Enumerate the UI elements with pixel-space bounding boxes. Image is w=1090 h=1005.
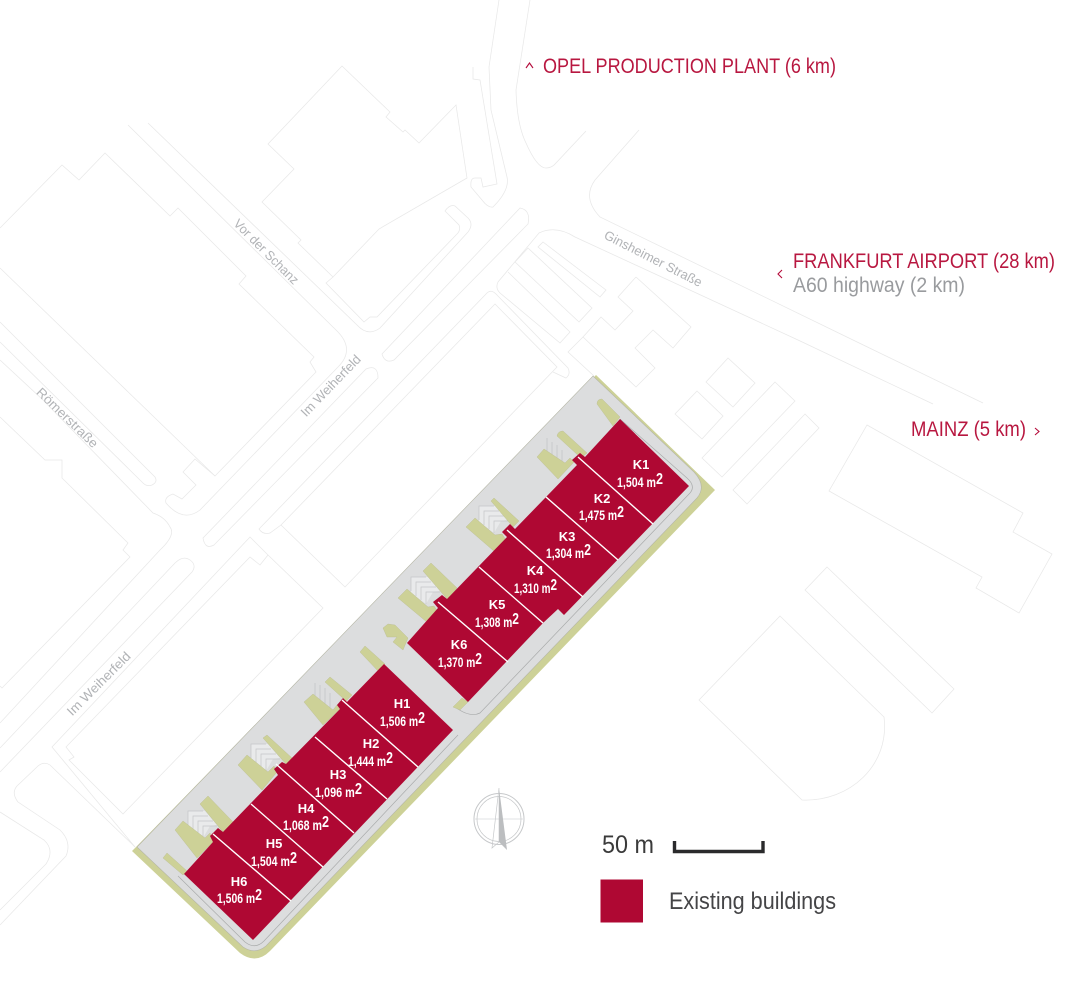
- label K1: [617, 457, 663, 490]
- callout: Mainz: MAINZ (5 km): [911, 417, 1026, 441]
- label H6: [217, 874, 262, 906]
- label K1: K1: [633, 457, 649, 472]
- label K5: [475, 597, 519, 630]
- label H2: 2: [386, 750, 393, 767]
- label K6: [438, 637, 482, 670]
- label H5: 2: [290, 850, 297, 867]
- label H3: 1,096 m: [315, 785, 365, 800]
- label H4: 1,068 m: [283, 818, 333, 833]
- street label: Römerstraße: Römerstraße: [33, 384, 101, 451]
- label H6: H6: [231, 874, 247, 889]
- label K5: 2: [512, 611, 519, 628]
- label K2: 1,475 m: [579, 508, 629, 523]
- legend: existing buildings: Existing buildings: [669, 888, 836, 915]
- label K1: 2: [656, 471, 663, 488]
- label H5: 1,504 m: [251, 854, 301, 869]
- label K3: 2: [584, 542, 591, 559]
- label H1: 2: [418, 710, 425, 727]
- scale bar: 50 m: 50 m: [602, 831, 654, 859]
- label H6: 2: [255, 887, 262, 904]
- label K4: 2: [550, 577, 557, 594]
- label H1: H1: [394, 696, 410, 711]
- callout: Opel production plant: OPEL PRODUCTION PLANT (6 km): [543, 54, 836, 78]
- label K2: [579, 491, 624, 523]
- label K5: K5: [489, 597, 505, 612]
- label H6: 1,506 m: [217, 891, 267, 906]
- label H3: 2: [355, 781, 362, 798]
- callout: Frankfurt Airport and A60 highway: A60 highway (2 km): [793, 273, 965, 297]
- label H1: [380, 696, 425, 729]
- buildings K1 to K6: [407, 419, 689, 702]
- label K3: [546, 529, 591, 561]
- street label: Vor der Schanz: Vor der Schanz: [231, 216, 302, 287]
- label H2: [348, 736, 393, 769]
- label H5: H5: [266, 836, 282, 851]
- label K5: 1,308 m: [475, 615, 525, 630]
- buildings H1 to H6: [184, 664, 453, 940]
- label H4: 2: [322, 814, 329, 831]
- label H4: H4: [298, 801, 315, 816]
- label K4: 1,310 m: [514, 581, 564, 596]
- site plot: green border and grey paving: [132, 375, 715, 959]
- label H3: H3: [330, 767, 346, 782]
- label K6: K6: [451, 637, 467, 652]
- label K3: K3: [559, 529, 575, 544]
- callout: Frankfurt Airport and A60 highway: [778, 249, 1055, 297]
- label K2: K2: [594, 491, 610, 506]
- street label: Ginsheimer Straße: Ginsheimer Straße: [602, 227, 705, 290]
- label H3: [315, 767, 362, 800]
- label H2: H2: [363, 736, 379, 751]
- label K1: 1,504 m: [617, 475, 667, 490]
- street label: Im Weiherfeld lower: Im Weiherfeld: [64, 649, 134, 719]
- label K2: 2: [617, 504, 624, 521]
- scale bar: 50 m: [602, 831, 763, 859]
- label K6: 2: [475, 651, 482, 668]
- label K4: K4: [527, 563, 544, 578]
- parking hatching and green planting strips: [163, 399, 620, 875]
- label K4: [514, 563, 557, 596]
- label H4: [283, 801, 329, 833]
- label H5: [251, 836, 297, 869]
- legend: existing buildings: [600, 880, 836, 922]
- street label: Im Weiherfeld upper: Im Weiherfeld: [297, 352, 364, 420]
- label K6: 1,370 m: [438, 655, 488, 670]
- label H2: 1,444 m: [348, 754, 398, 769]
- label H1: 1,506 m: [380, 714, 430, 729]
- label K3: 1,304 m: [546, 546, 596, 561]
- icon: north arrow compass: [474, 788, 524, 850]
